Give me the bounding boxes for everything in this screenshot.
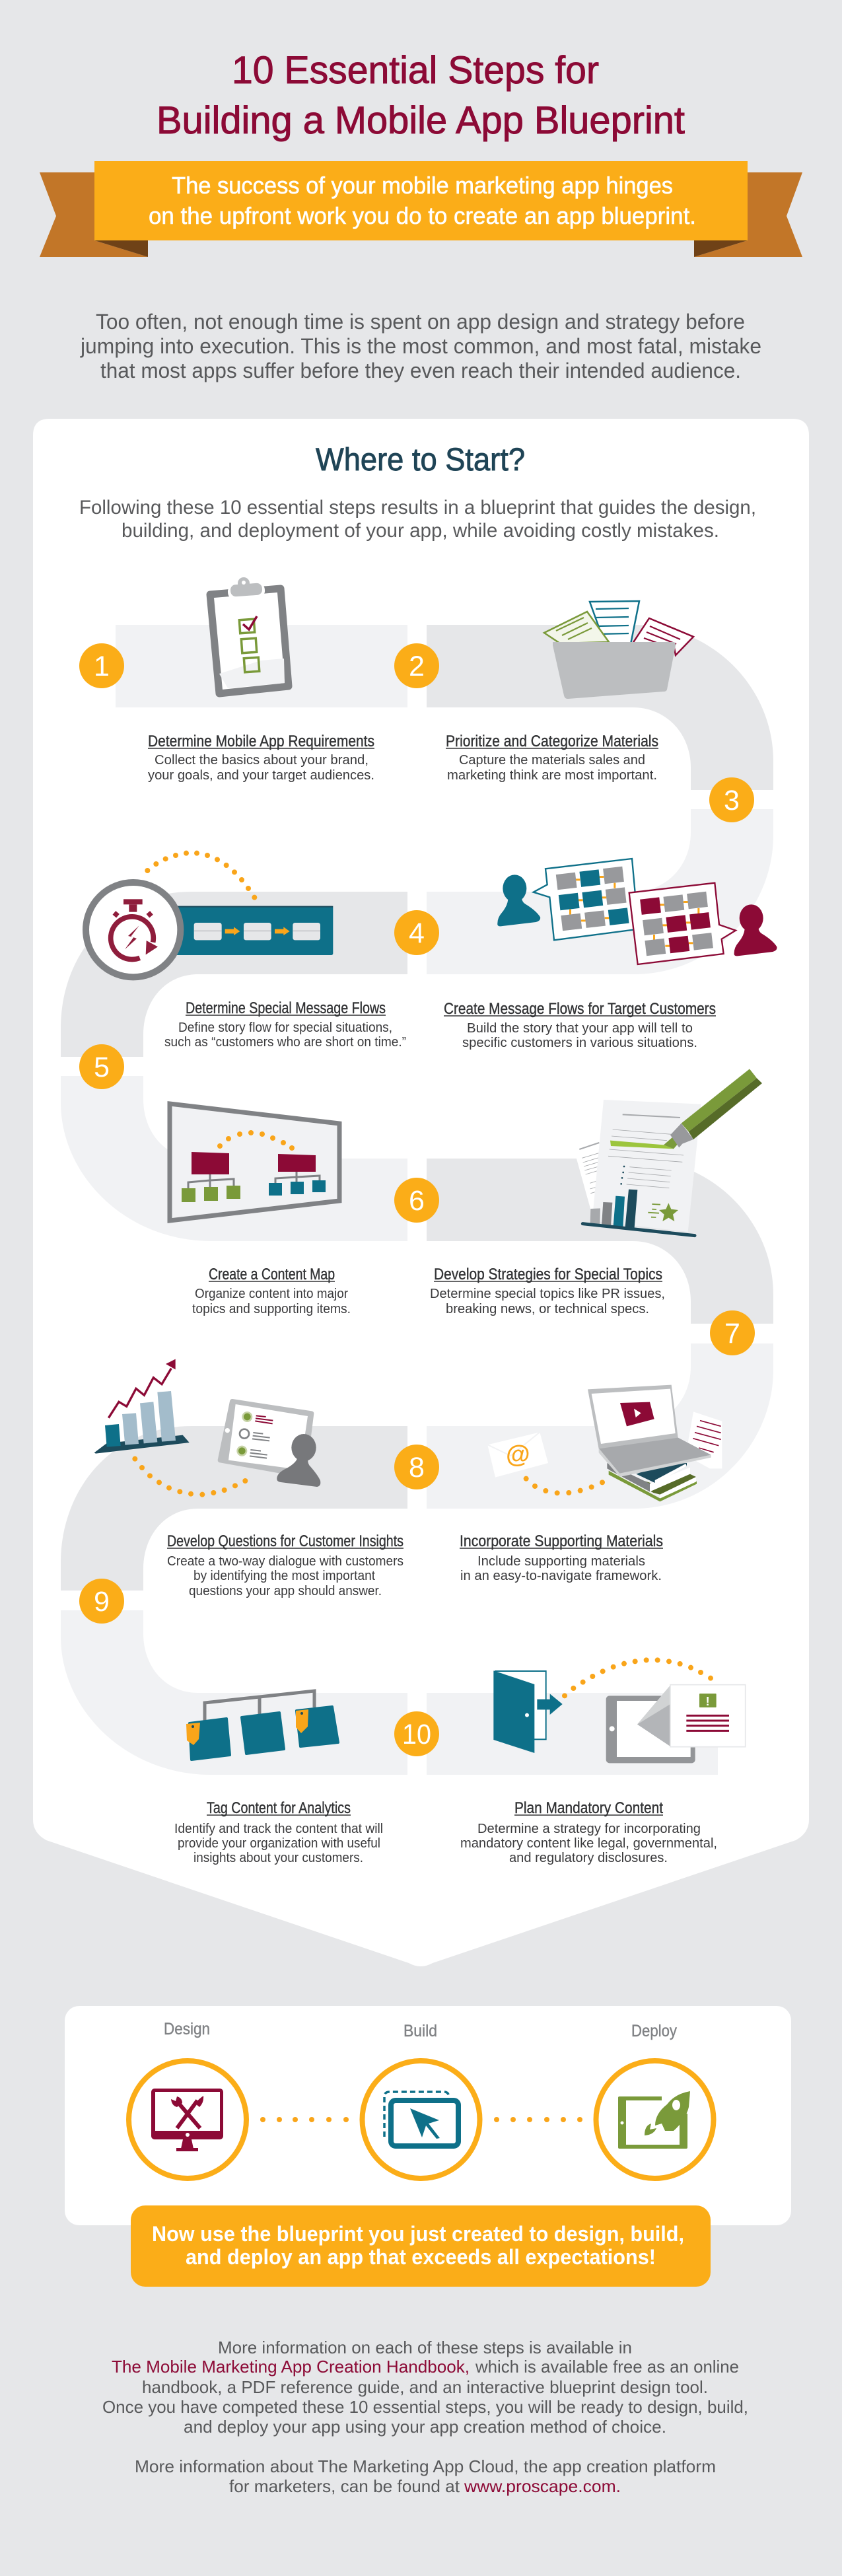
step 7 text: customer insights <box>167 1532 403 1598</box>
step 9 text: tag content <box>174 1799 383 1865</box>
winding road path <box>61 625 773 1775</box>
step 6 text: special topics: Determine special topics like PR issues, <box>430 1287 665 1301</box>
step number circles: 9 <box>94 1586 110 1618</box>
title: Building a Mobile App Blueprint <box>157 99 685 142</box>
callout: call to action: and deploy an app that exceeds all expectations! <box>186 2245 656 2269</box>
label: design: Design <box>164 2020 210 2038</box>
icon: clipboard checklist <box>210 577 289 694</box>
step 10 text: mandatory content: Determine a strategy for incorporating <box>477 1822 701 1836</box>
footer text: marketing app cloud: for marketers, can be found at <box>229 2476 460 2496</box>
step number circles: 2 <box>409 651 425 682</box>
where to start intro text: building, and deployment of your app, while avoiding costly mistakes. <box>122 520 719 542</box>
step number circles: 7 <box>724 1318 740 1349</box>
footer text: marketing app cloud: More information about The Marketing App Cloud, the app creation platform <box>135 2456 716 2476</box>
step 3 text: message flows for target customers: Create Message Flows for Target Customers <box>444 1000 716 1018</box>
step 8 text: supporting materials: Incorporate Supporting Materials <box>460 1532 663 1550</box>
title <box>157 49 685 142</box>
footer text: marketing app cloud <box>135 2456 716 2496</box>
step 4 text: special message flows <box>164 999 406 1050</box>
ribbon banner: on the upfront work you do to create an app blueprint. <box>149 202 696 229</box>
icon: document with highlighter <box>575 1069 762 1236</box>
panel: where to start <box>33 419 809 1966</box>
where to start intro text <box>79 497 756 542</box>
step 9 text: tag content: provide your organization with useful <box>178 1836 380 1851</box>
step number circles: 3 <box>724 785 740 816</box>
icon: door and tablet with notice <box>493 1657 746 1763</box>
step 5 text: content map: topics and supporting items. <box>192 1302 351 1316</box>
step 3 text: message flows for target customers <box>444 1000 716 1050</box>
icon: content map board <box>170 1104 339 1221</box>
step 2 text: Prioritize and Categorize Materials <box>446 733 658 750</box>
step 3 text: message flows for target customers: specific customers in various situations. <box>462 1036 697 1050</box>
step 7 text: customer insights: by identifying the most important <box>193 1569 375 1583</box>
footer text: handbook information <box>102 2338 748 2437</box>
step 6 text: special topics: breaking news, or technical specs. <box>446 1302 649 1316</box>
step number circles: 4 <box>409 917 425 949</box>
title: 10 Essential Steps for <box>232 49 599 92</box>
step 1 text: your goals, and your target audiences. <box>148 768 374 783</box>
where to start intro text: Following these 10 essential steps results in a blueprint that guides the design, <box>79 497 756 519</box>
intro paragraph: that most apps suffer before they even reach their intended audience. <box>100 359 741 382</box>
intro paragraph <box>80 310 761 382</box>
footer text: handbook information: handbook, a PDF reference guide, and an interactive blueprint design tool. <box>142 2377 708 2397</box>
footer text: marketing app cloud: www.proscape.com. <box>464 2476 621 2496</box>
icon: folder of documents <box>544 601 693 699</box>
label: deploy: Deploy <box>631 2022 677 2040</box>
footer text: handbook information: which is available free as an online <box>475 2357 739 2377</box>
step 10 text: mandatory content <box>460 1799 717 1865</box>
step 6 text: special topics <box>430 1266 665 1316</box>
icon: design monitor <box>129 2061 246 2178</box>
icon: rising chart and survey tablet <box>94 1359 320 1497</box>
step 8 text: supporting materials <box>460 1532 663 1583</box>
step number circles: 1 <box>94 651 110 682</box>
step 1 text: Collect the basics about your brand, <box>155 753 368 768</box>
footer text: handbook information: More information on each of these steps is available in <box>218 2338 632 2357</box>
callout: call to action <box>131 2205 711 2287</box>
step number circles: 5 <box>94 1052 110 1083</box>
step 2 text: marketing think are most important. <box>447 768 657 783</box>
step 9 text: tag content: insights about your customers. <box>193 1851 363 1865</box>
label: build: Build <box>403 2022 437 2040</box>
icon: stopwatch with message flow <box>86 851 333 977</box>
step 3 text: message flows for target customers: Build the story that your app will tell to <box>467 1021 693 1036</box>
icon: tagged content cards <box>186 1691 338 1760</box>
panel: design build deploy <box>65 2006 791 2225</box>
callout: call to action: Now use the blueprint you just created to design, build, <box>152 2222 684 2246</box>
step 4 text: special message flows: such as “customers who are short on time.” <box>164 1035 406 1050</box>
icon: deploy rocket tablet <box>596 2061 713 2178</box>
step 5 text: content map <box>192 1266 351 1316</box>
step 10 text: mandatory content: mandatory content like legal, governmental, <box>460 1836 717 1851</box>
ribbon banner <box>40 161 802 257</box>
ribbon banner: The success of your mobile marketing app hinges <box>172 172 673 199</box>
step 1 text <box>148 733 374 783</box>
step 8 text: supporting materials: Include supporting materials <box>477 1554 645 1569</box>
connector dots <box>260 2117 582 2122</box>
footer text: handbook information: The Mobile Marketing App Creation Handbook, <box>112 2357 470 2377</box>
step 10 text: mandatory content: Plan Mandatory Content <box>514 1799 663 1817</box>
step 4 text: special message flows: Define story flow for special situations, <box>178 1020 392 1035</box>
icon: message flows for customers <box>497 859 777 964</box>
step number circles <box>79 643 755 1756</box>
step number circles: 8 <box>409 1452 425 1484</box>
step 9 text: tag content: Tag Content for Analytics <box>207 1799 351 1817</box>
step 1 text: Determine Mobile App Requirements <box>148 733 374 750</box>
icon: email, laptop and books: @ <box>506 1440 530 1468</box>
step 7 text: customer insights: Create a two-way dialogue with customers <box>167 1554 403 1569</box>
step 10 text: mandatory content: and regulatory disclosures. <box>509 1851 668 1865</box>
step 2 text: Capture the materials sales and <box>459 753 645 768</box>
footer text: handbook information: and deploy your app using your app creation method of choice. <box>184 2417 666 2437</box>
icon: build cursor window <box>362 2061 479 2178</box>
step 5 text: content map: Create a Content Map <box>209 1266 335 1283</box>
step number circles: 10 <box>402 1719 431 1750</box>
step 7 text: customer insights: Develop Questions for Customer Insights <box>167 1532 403 1550</box>
step 2 text <box>446 733 658 783</box>
step number circles: 6 <box>409 1185 425 1217</box>
heading: where to start: Where to Start? <box>316 443 525 478</box>
icon: door and tablet with notice: ! <box>706 1694 710 1708</box>
step 5 text: content map: Organize content into major <box>195 1287 348 1301</box>
step 9 text: tag content: Identify and track the content that will <box>174 1822 383 1836</box>
intro paragraph: jumping into execution. This is the most common, and most fatal, mistake <box>80 334 761 358</box>
intro paragraph: Too often, not enough time is spent on app design and strategy before <box>96 310 745 334</box>
footer text: handbook information: Once you have competed these 10 essential steps, you will be ready to design, build, <box>102 2397 748 2417</box>
step 7 text: customer insights: questions your app should answer. <box>189 1584 382 1598</box>
step 8 text: supporting materials: in an easy-to-navigate framework. <box>460 1569 662 1583</box>
step 4 text: special message flows: Determine Special Message Flows <box>186 999 386 1017</box>
icon: email, laptop and books <box>487 1385 722 1501</box>
step 6 text: special topics: Develop Strategies for Special Topics <box>434 1266 662 1283</box>
